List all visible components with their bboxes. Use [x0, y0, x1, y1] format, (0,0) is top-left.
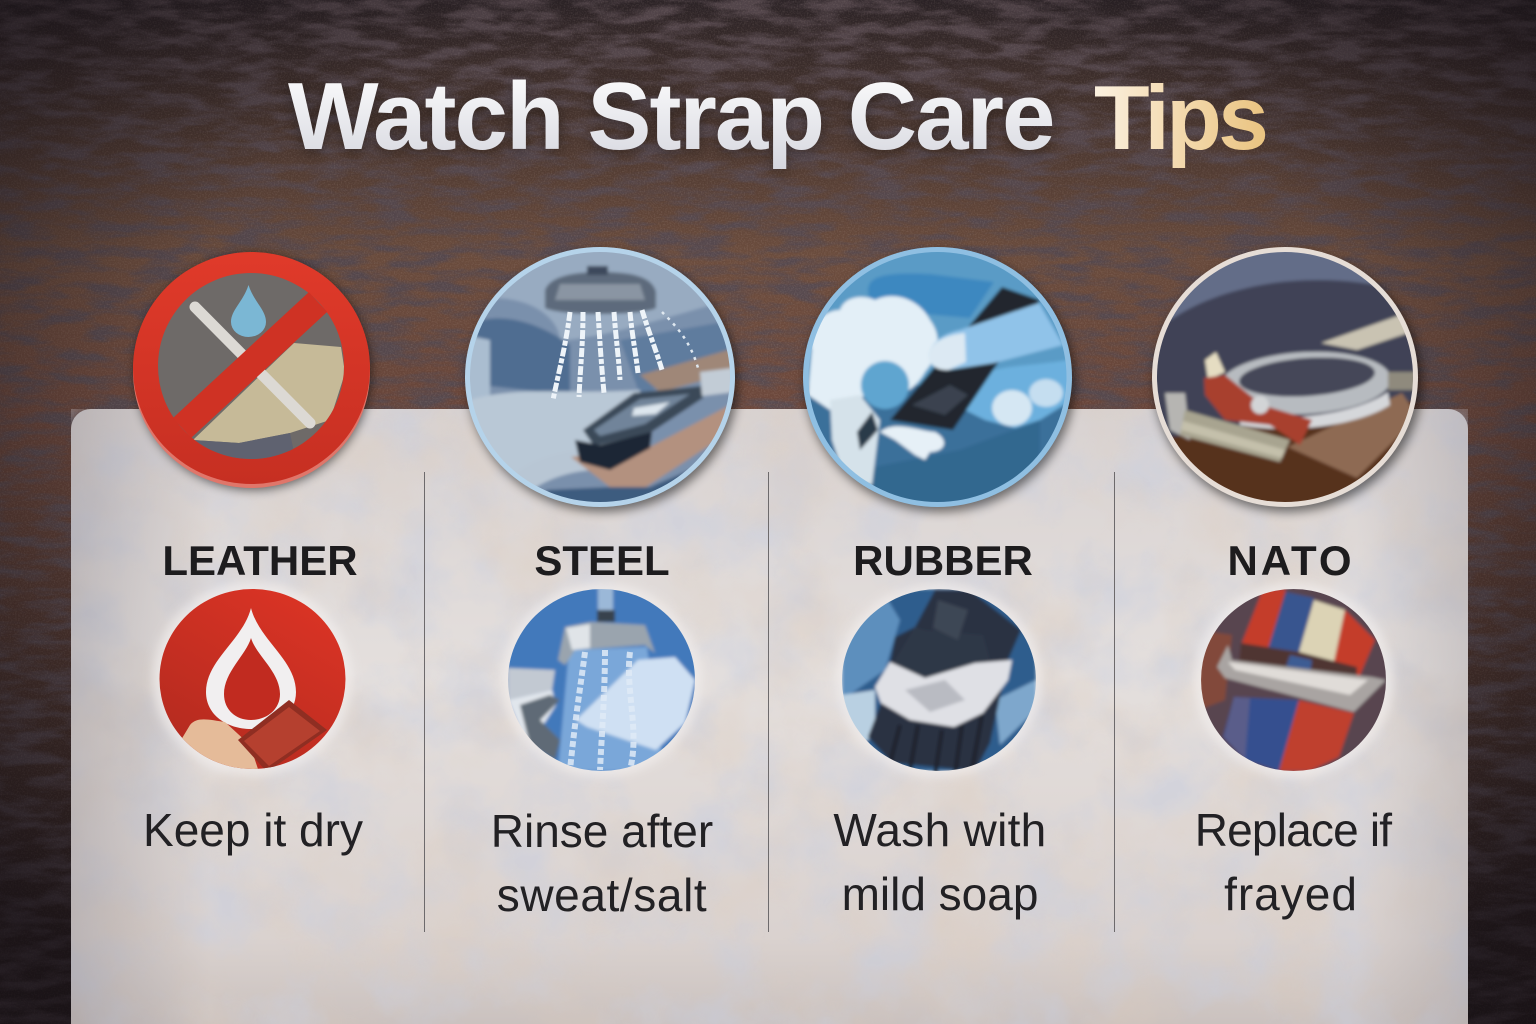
- title: Watch Strap Care: [288, 66, 1053, 173]
- icon: shower rinsing steel watch: [465, 244, 738, 512]
- tip: nato: Replace if: [1195, 804, 1391, 856]
- panel: light paper card: [71, 409, 1468, 1024]
- tip: rubber: Wash with: [833, 804, 1047, 856]
- heading: rubber: RUBBER: [853, 537, 1033, 584]
- icon: washing rubber strap: [803, 247, 1075, 512]
- tip: nato: [1195, 804, 1392, 920]
- title: Tips: [1094, 68, 1265, 169]
- icon: frayed NATO strap: [1194, 583, 1394, 777]
- tip: rubber: [833, 804, 1047, 920]
- icon: keep dry drop: [152, 582, 352, 776]
- icon: no water on leather badge: [133, 252, 371, 490]
- heading: leather: LEATHER: [162, 537, 358, 584]
- heading: nato: NATO: [1227, 537, 1355, 584]
- tip: rubber: mild soap: [842, 868, 1038, 920]
- icon: rubber strap with soap: [836, 583, 1042, 777]
- icon: rinse steel strap: [502, 583, 702, 777]
- icon: NATO strap and watch: [1152, 247, 1422, 512]
- title: Watch Strap Care: [288, 63, 1053, 170]
- heading: steel: STEEL: [534, 537, 670, 584]
- tip: steel: Rinse after: [491, 805, 713, 857]
- tip: nato: frayed: [1224, 868, 1358, 920]
- tip: steel: [491, 805, 713, 921]
- tip: steel: sweat/salt: [497, 869, 707, 921]
- tip: leather: Keep it dry: [143, 804, 363, 856]
